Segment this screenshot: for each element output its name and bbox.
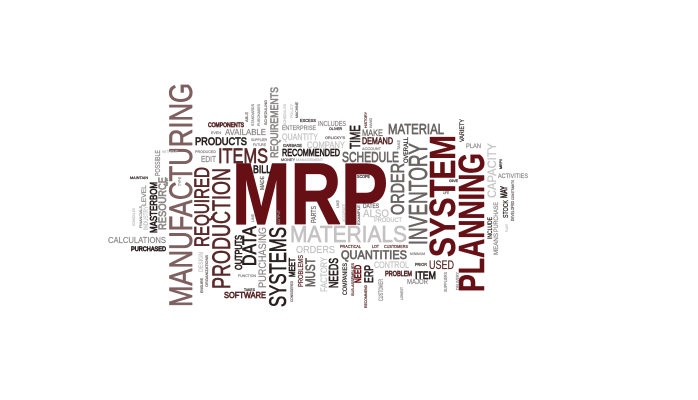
- word: EXAMPLE: EXAMPLE: [356, 205, 361, 225]
- word: HISTORY: HISTORY: [363, 112, 368, 128]
- word: SUPPLIERS: SUPPLIERS: [443, 272, 448, 292]
- word: FINANCIALS: FINANCIALS: [138, 206, 143, 228]
- word: ITEM: ITEM: [415, 270, 436, 282]
- word: OLIVER: OLIVER: [329, 126, 342, 131]
- word: LOWEST: LOWEST: [399, 287, 404, 300]
- word: SYSTEMS: SYSTEMS: [265, 227, 292, 307]
- word: NEED: NEED: [353, 265, 363, 283]
- word: FUTURE: FUTURE: [253, 142, 266, 147]
- word: ACCURATE: ACCURATE: [341, 204, 346, 222]
- word: PARTS: PARTS: [311, 206, 318, 223]
- word: SCOPE: SCOPE: [357, 174, 370, 179]
- word: GARBAGE: GARBAGE: [283, 143, 302, 148]
- word: ENSURE: ENSURE: [199, 278, 204, 293]
- word: CONSIDERED: CONSIDERED: [289, 281, 294, 302]
- word: STANDARDS: STANDARDS: [250, 104, 255, 126]
- word: SCHEDULE: SCHEDULE: [342, 149, 399, 166]
- word: RECOMMENDED: RECOMMENDED: [282, 148, 340, 159]
- word: MAKE: MAKE: [362, 128, 383, 138]
- word: TAKES: TAKES: [244, 287, 255, 292]
- word: MADE: MADE: [260, 175, 266, 190]
- word: PLAN: PLAN: [466, 143, 481, 150]
- word: INCLUDE: INCLUDE: [488, 217, 494, 239]
- word: AVAILABLE: AVAILABLE: [225, 127, 266, 137]
- word: MEANS: MEANS: [493, 232, 500, 255]
- word: RESOURCE: RESOURCE: [157, 177, 169, 230]
- word: NEW: NEW: [164, 178, 169, 186]
- word: ALSO: ALSO: [363, 208, 389, 220]
- word: EXCESS: EXCESS: [300, 118, 316, 123]
- word: MONEY: MONEY: [281, 157, 295, 162]
- word: EDIT: EDIT: [201, 155, 216, 164]
- word: REQUIRED: REQUIRED: [191, 167, 214, 247]
- word: LIKE: LIKE: [335, 200, 340, 208]
- word: OVERALL: OVERALL: [404, 136, 410, 163]
- word: ENTERPRISE: ENTERPRISE: [282, 125, 317, 132]
- word: MUST: MUST: [302, 258, 318, 287]
- word: BILL: BILL: [253, 164, 271, 176]
- word: WITHOUT: WITHOUT: [162, 149, 178, 154]
- word: OUTPUTS: OUTPUTS: [234, 235, 245, 270]
- word: COMPONENTS: COMPONENTS: [208, 123, 244, 129]
- word: VARIETY: VARIETY: [459, 118, 466, 142]
- word: PRACTICAL: PRACTICAL: [340, 244, 361, 249]
- word: ACCOUNT: ACCOUNT: [362, 146, 382, 151]
- word: MRPII: MRPII: [498, 159, 503, 169]
- word: ABLE: ABLE: [244, 112, 249, 122]
- word: DELIVERY: DELIVERY: [455, 272, 460, 290]
- word: ORDERS: ORDERS: [296, 245, 335, 256]
- word: ERP: ERP: [362, 265, 376, 283]
- word: SCHEDULES: SCHEDULES: [282, 104, 287, 126]
- word: STOCK: STOCK: [503, 200, 510, 218]
- word: QUANTITIES: QUANTITIES: [341, 248, 407, 262]
- word: RECOMMEND: RECOMMEND: [363, 285, 368, 308]
- word: CUSTOMER: CUSTOMER: [379, 279, 385, 301]
- word: HAND: HAND: [368, 118, 373, 128]
- word: PRODUCED: PRODUCED: [195, 149, 216, 154]
- word: INVENTORY: INVENTORY: [403, 143, 433, 245]
- word: REQUIREMENTS: REQUIREMENTS: [269, 87, 281, 158]
- word: EVEN: EVEN: [211, 131, 221, 135]
- word: CONTROL: CONTROL: [374, 260, 409, 271]
- word: LINE: LINE: [250, 214, 255, 222]
- word: ITEMS: ITEMS: [218, 145, 268, 168]
- word: SCHEDULES small: SCHEDULES: [131, 208, 136, 226]
- word: USED: USED: [429, 258, 454, 272]
- word: INCLUDES: INCLUDES: [318, 121, 346, 128]
- word: SOFTWARE: SOFTWARE: [224, 290, 266, 300]
- word: ACTIVITIES: ACTIVITIES: [498, 173, 529, 180]
- word: PURCHASED: PURCHASED: [131, 247, 167, 253]
- word: MATERIAL: MATERIAL: [388, 121, 444, 138]
- word: FUNCTION: FUNCTION: [238, 273, 256, 278]
- word: DATA: DATA: [240, 226, 261, 266]
- word: CUSTOMERS: CUSTOMERS: [384, 244, 408, 249]
- word: PURCHASE: PURCHASE: [493, 201, 500, 232]
- word: DATES: DATES: [363, 204, 379, 210]
- word: PRODUCT: PRODUCT: [374, 218, 402, 224]
- word: PURCHASES: PURCHASES: [256, 104, 261, 126]
- word: MAJOR: MAJOR: [407, 279, 428, 286]
- word: PRODUCTS: PRODUCTS: [195, 136, 247, 148]
- word: PLANT: PLANT: [504, 224, 509, 232]
- word: QUANTITY: QUANTITY: [282, 132, 318, 142]
- word: MATERIALS: MATERIALS: [290, 221, 407, 247]
- word: PRODUCTION: PRODUCTION: [208, 168, 236, 289]
- word: SCHEDULING: SCHEDULING: [263, 100, 268, 125]
- word: MAY: MAY: [499, 186, 509, 198]
- word: NEEDS: NEEDS: [326, 258, 341, 288]
- word: INDUSTRY: INDUSTRY: [144, 206, 150, 230]
- word: MINIMUM: MINIMUM: [410, 251, 425, 256]
- word: ORDER: ORDER: [388, 163, 408, 215]
- word: PLANNING: PLANNING: [451, 153, 492, 292]
- word: POSSIBLE: POSSIBLE: [155, 150, 162, 176]
- word: GIVE: GIVE: [449, 178, 458, 183]
- word: PROBLEMS: PROBLEMS: [298, 255, 305, 287]
- word: OUTPUT: OUTPUT: [276, 210, 281, 224]
- word: DESIGN: DESIGN: [199, 252, 205, 272]
- word: CALCULATIONS: CALCULATIONS: [108, 235, 166, 245]
- word: TAKE: TAKE: [396, 140, 401, 150]
- word: SYSTEM: SYSTEM: [422, 135, 463, 257]
- word: MAINTAIN: MAINTAIN: [130, 175, 148, 180]
- word: DEVELOPED: DEVELOPED: [510, 200, 515, 221]
- word: CONSTRAINTS: CONSTRAINTS: [510, 180, 515, 200]
- word: CAPACITY: CAPACITY: [485, 143, 499, 198]
- word: COMPANIES: COMPANIES: [343, 263, 349, 295]
- word: LIFE: LIFE: [443, 190, 449, 195]
- word: LOT: LOT: [372, 244, 379, 249]
- word: ORLICKY'S: ORLICKY'S: [325, 135, 345, 140]
- word: POLICY: POLICY: [289, 104, 294, 118]
- word: MACHINE: MACHINE: [294, 102, 299, 118]
- word: MANUFACTURING: MANUFACTURING: [163, 83, 199, 307]
- word: COMPANY: COMPANY: [307, 140, 345, 150]
- word: DEMAND: DEMAND: [362, 136, 393, 146]
- word: MRP: MRP: [232, 146, 388, 243]
- word: TYPE: TYPE: [177, 177, 182, 186]
- word: PROBLEM: PROBLEM: [385, 271, 412, 278]
- word: FACTORY: FACTORY: [319, 257, 329, 292]
- word: MANAGEMENT: MANAGEMENT: [296, 157, 324, 162]
- word: PRIOR: PRIOR: [415, 262, 428, 267]
- word: MASTERBOM: MASTERBOM: [149, 182, 160, 233]
- word: SUPPLIER: SUPPLIER: [251, 137, 267, 142]
- word: ORGANIZATIONS: ORGANIZATIONS: [204, 255, 209, 287]
- word: MEET: MEET: [288, 258, 297, 277]
- word: PURCHASING: PURCHASING: [257, 227, 269, 288]
- word: SUB-ASSEMBLIES: SUB-ASSEMBLIES: [350, 263, 355, 296]
- word: LEVEL: LEVEL: [142, 184, 148, 206]
- word: TIME: TIME: [347, 125, 364, 149]
